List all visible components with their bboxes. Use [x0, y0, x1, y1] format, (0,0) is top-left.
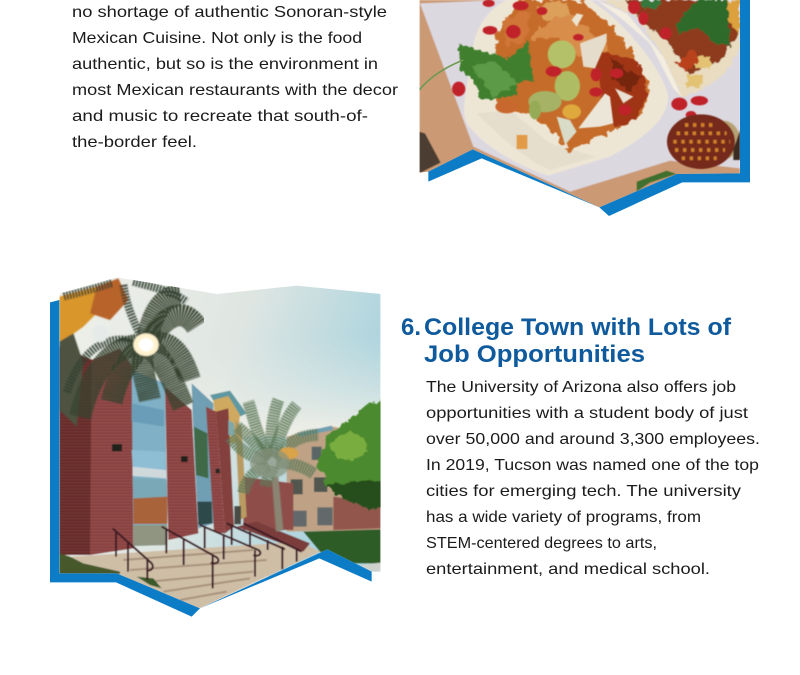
text block: University of Arizona: cities for emerging tech. The university [426, 483, 741, 500]
second glass [192, 383, 213, 528]
text block: University of Arizona: In 2019, Tucson was named one of the top [426, 457, 759, 474]
big palm fronds [59, 278, 197, 427]
cilantro [458, 41, 533, 99]
text block: University of Arizona [426, 379, 760, 578]
heading: item 6: Job Opportunities [424, 341, 645, 368]
text block: Mexican cuisine: most Mexican restaurants with the decor [72, 82, 398, 99]
heading: item 6: 6. [401, 314, 421, 341]
spice spoon [667, 114, 740, 169]
text block: Mexican cuisine [72, 4, 398, 151]
glass column [132, 370, 167, 546]
heading: item 6: College Town with Lots of [424, 314, 732, 341]
pomegranate seeds [452, 0, 708, 119]
wall lamps [112, 444, 122, 451]
green tree [318, 401, 387, 511]
text block: University of Arizona: has a wide variety of programs, from [426, 509, 701, 526]
photo: tacos [419, 0, 750, 216]
handrails [113, 523, 302, 588]
text block: Mexican cuisine: no shortage of authentic Sonoran-style [72, 4, 387, 21]
blue frame: building [50, 300, 372, 617]
text block: University of Arizona: opportunities with a student body of just [426, 405, 749, 422]
steps and plaza [72, 542, 320, 608]
text block: University of Arizona: entertainment, and medical school. [426, 561, 710, 578]
stair ramp wall [237, 522, 310, 552]
text block: Mexican cuisine: Mexican Cuisine. Not only is the food [72, 30, 362, 47]
small palm [230, 400, 318, 532]
rear wing [287, 427, 381, 532]
text block: Mexican cuisine: the-border feel. [72, 134, 197, 151]
text block: University of Arizona: over 50,000 and around 3,300 employees. [426, 431, 760, 448]
second brick column [165, 387, 198, 540]
blue frame: tacos [428, 0, 750, 216]
second taco [602, 0, 740, 97]
photo: university building [50, 277, 387, 617]
text block: Mexican cuisine: authentic, but so is the environment in [72, 56, 378, 73]
shrubs [59, 553, 120, 574]
text block: Mexican cuisine: and music to recreate that south-of- [72, 108, 368, 125]
main brick tower [59, 347, 93, 555]
heading: item 6 [401, 314, 732, 368]
text block: University of Arizona: The University of Arizona also offers job [426, 379, 736, 396]
text block: University of Arizona: STEM-centered degrees to arts, [426, 535, 657, 552]
lawn [303, 529, 381, 563]
mid building [243, 477, 293, 530]
